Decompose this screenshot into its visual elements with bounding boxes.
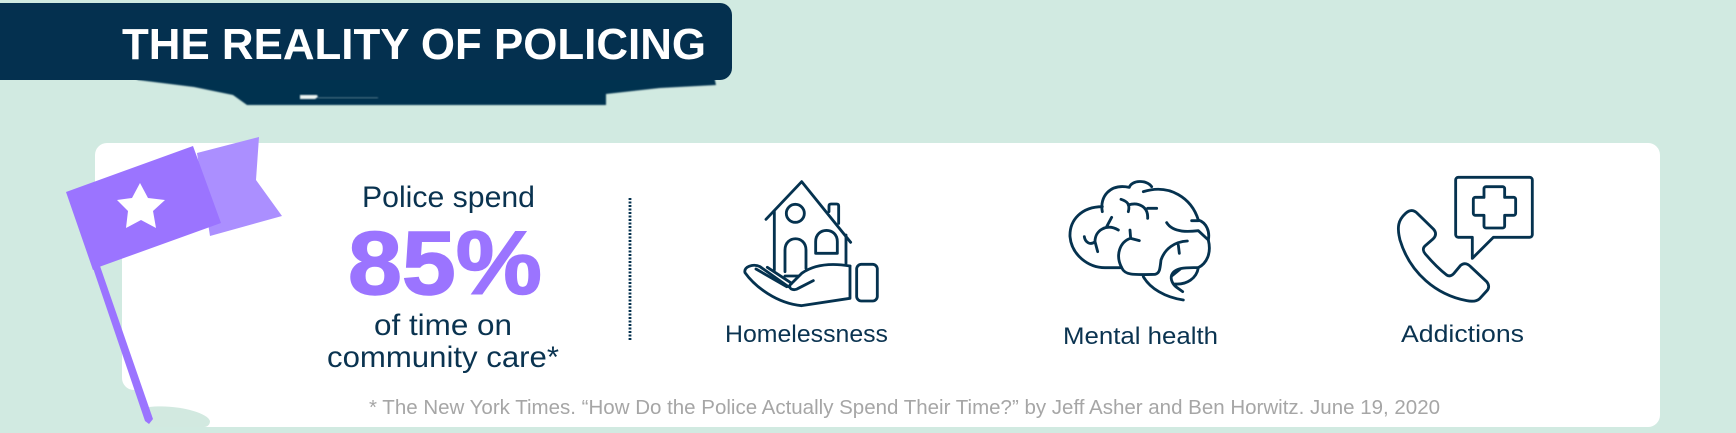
- flag front: [66, 146, 221, 270]
- label: Homelessness: Homelessness: [725, 321, 888, 348]
- flag back ribbon: [197, 137, 282, 236]
- icon: purple flag with star: [66, 137, 282, 424]
- icon: brain: [1070, 181, 1209, 300]
- text: of time on: of time on: [374, 309, 512, 342]
- star: [117, 183, 165, 228]
- icon: house on hand: [745, 182, 877, 306]
- footnote: * The New York Times. “How Do the Police Actually Spend Their Time?” by Jeff Asher and Ben Horwitz. June 19, 2020: [369, 397, 1440, 419]
- label: Mental health: Mental health: [1063, 323, 1218, 350]
- statistic: 85 percent: [327, 181, 559, 374]
- label: Addictions: Addictions: [1401, 321, 1524, 348]
- big number: 85%: [348, 214, 542, 314]
- heading banner: [0, 3, 732, 105]
- lead-in text: Police spend: [362, 181, 535, 214]
- flag pole: [93, 266, 153, 424]
- title: THE REALITY OF POLICING: [122, 20, 706, 69]
- icon: phone with medical speech bubble: [1398, 177, 1532, 301]
- text: community care: community care*: [327, 341, 559, 374]
- panel: white card: [95, 143, 1660, 427]
